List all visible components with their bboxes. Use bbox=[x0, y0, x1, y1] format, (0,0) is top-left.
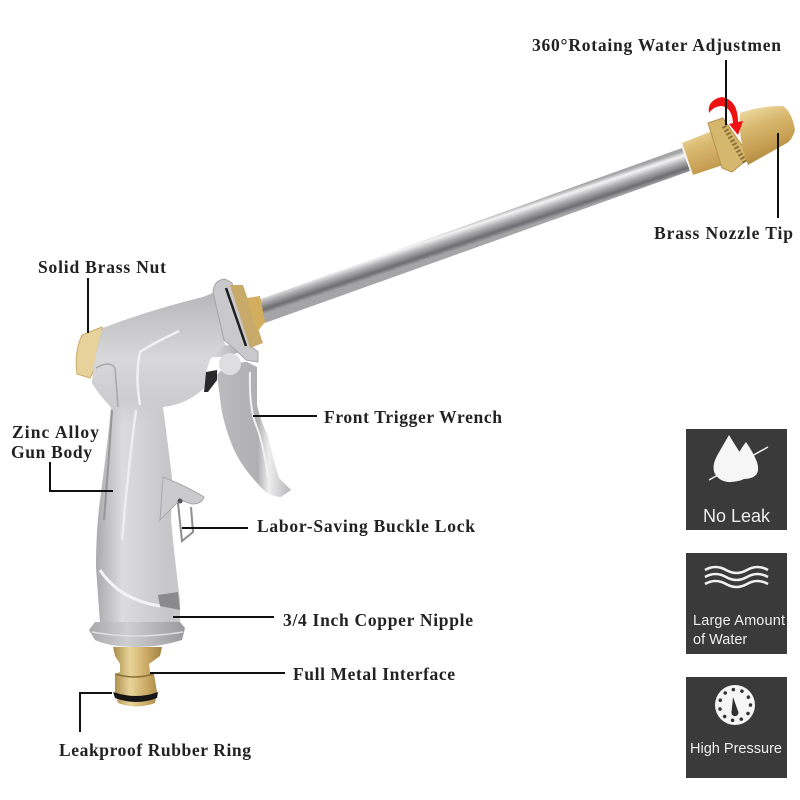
front brass nut bbox=[230, 285, 265, 348]
head collar bbox=[213, 279, 258, 362]
text: large amount of water: Large Amount bbox=[693, 613, 785, 629]
label: zinc alloy gun body: Gun Body bbox=[11, 442, 92, 462]
icon: water drops bbox=[709, 435, 768, 482]
flange bbox=[89, 622, 185, 647]
text: high pressure: High Pressure bbox=[690, 741, 782, 757]
rear brass nut bbox=[76, 327, 104, 378]
text: large amount of water: of Water bbox=[693, 632, 747, 648]
label: zinc alloy gun body: Zinc Alloy bbox=[12, 422, 99, 442]
nozzle bbox=[682, 97, 795, 175]
label: front trigger wrench: Front Trigger Wrench bbox=[324, 407, 502, 427]
rubber ring bbox=[113, 692, 158, 702]
text: no leak: No Leak bbox=[703, 506, 771, 526]
body contours bbox=[96, 331, 179, 606]
icon: waves bbox=[705, 567, 768, 587]
metal tube bbox=[255, 148, 690, 324]
spray gun bbox=[76, 97, 795, 706]
trigger bbox=[204, 353, 291, 497]
label: zinc alloy gun body bbox=[11, 422, 99, 462]
label: buckle lock: Labor-Saving Buckle Lock bbox=[257, 516, 475, 536]
label: full metal interface: Full Metal Interface bbox=[293, 664, 455, 684]
brass connector bbox=[113, 647, 162, 706]
label: solid brass nut: Solid Brass Nut bbox=[38, 257, 166, 277]
head shading bbox=[92, 293, 225, 425]
panel: large amount of water bbox=[686, 553, 787, 654]
text: large amount of water bbox=[693, 613, 785, 648]
label: copper nipple: 3/4 Inch Copper Nipple bbox=[283, 610, 473, 630]
icon: pressure gauge bbox=[715, 685, 755, 725]
label: brass nozzle tip: Brass Nozzle Tip bbox=[654, 223, 793, 243]
red rotation arrow bbox=[709, 97, 743, 135]
leader lines bbox=[50, 60, 778, 732]
label: rubber ring: Leakproof Rubber Ring bbox=[59, 740, 251, 760]
panel: no leak bbox=[686, 429, 787, 530]
gun body bbox=[92, 293, 246, 624]
label: rotating water adjustment: 360°Rotaing Water Adjustmen bbox=[532, 35, 781, 55]
buckle lock bbox=[160, 477, 204, 541]
panel: high pressure bbox=[686, 677, 787, 778]
